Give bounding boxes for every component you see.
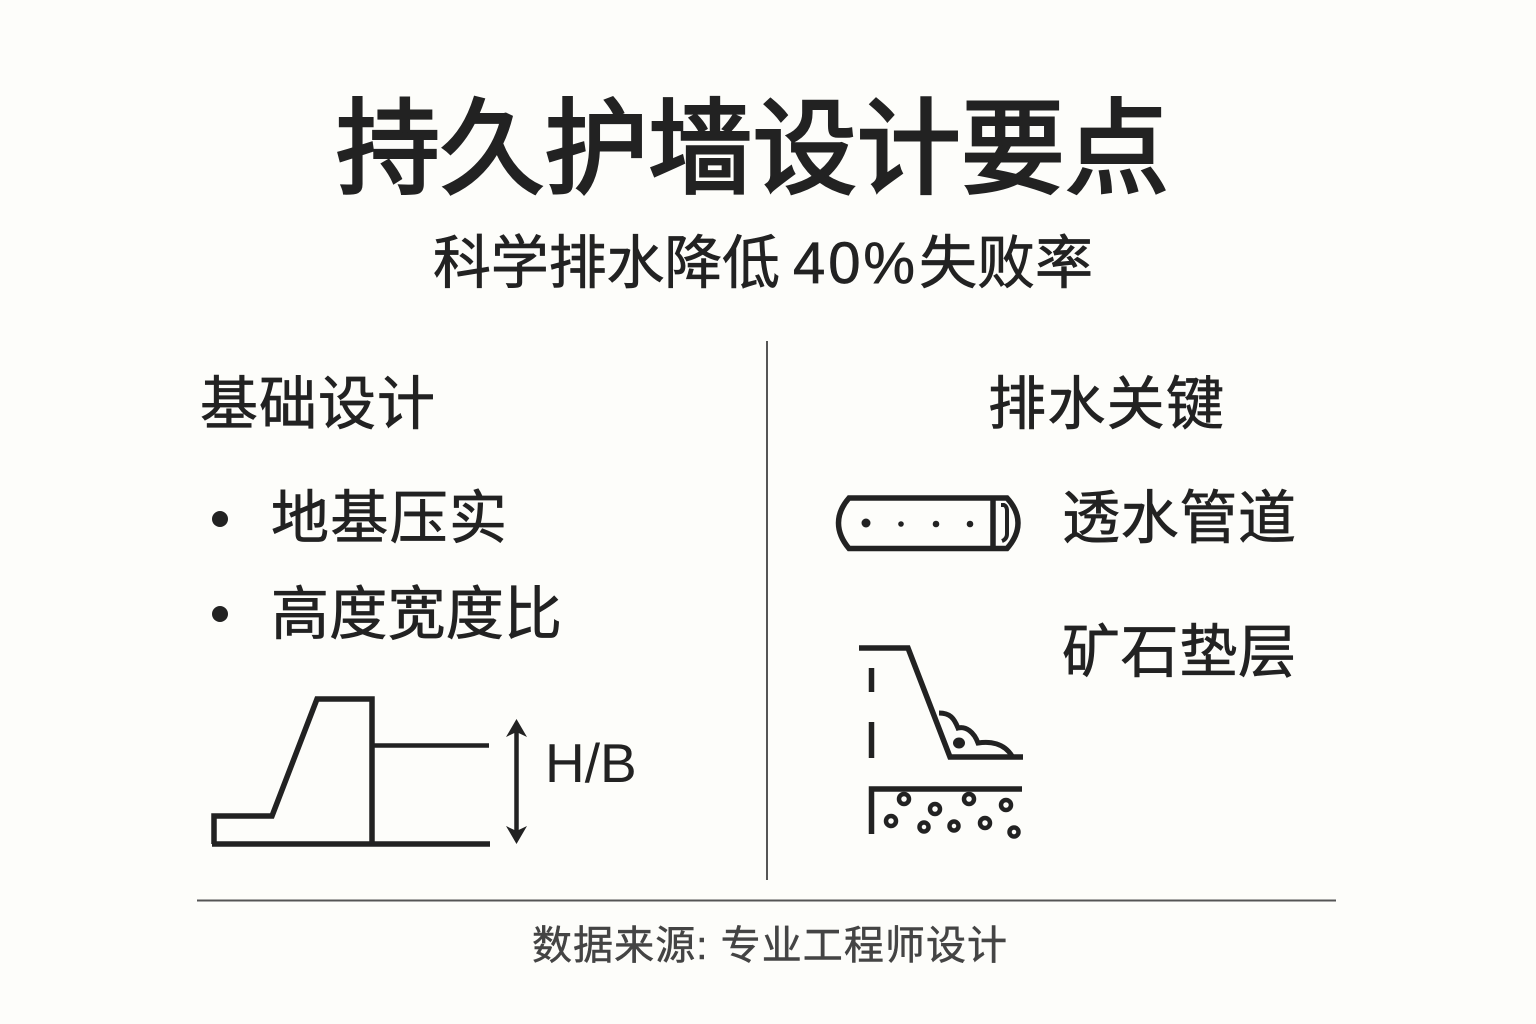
icon: gravel bedding [859, 648, 1023, 836]
label: H/B: H/B [545, 732, 637, 794]
heading: foundation design: 基础设计 [200, 372, 435, 437]
label: permeable pipe: 透水管道 [1062, 486, 1296, 551]
subtitle: 科学排水降低 [433, 231, 780, 296]
list item: height to width ratio: 高度宽度比 [271, 582, 562, 647]
icon: perforated pipe [838, 497, 1018, 549]
arrow: height dimension [506, 719, 527, 844]
source note: 数据来源: 专业工程师设计 [532, 924, 1007, 968]
diagram: retaining wall cross-section [212, 699, 490, 844]
subtitle [433, 231, 1093, 296]
panel: foundation design [200, 372, 637, 844]
list item: ground compaction: 地基压实 [271, 486, 507, 551]
title: 持久护墙设计要点 [336, 92, 1169, 208]
panel: drainage key points [838, 372, 1296, 836]
label: gravel layer: 矿石垫层 [1062, 620, 1296, 685]
heading: drainage key: 排水关键 [988, 372, 1224, 437]
subtitle: 40% [793, 231, 915, 296]
subtitle: 失败率 [919, 231, 1093, 296]
